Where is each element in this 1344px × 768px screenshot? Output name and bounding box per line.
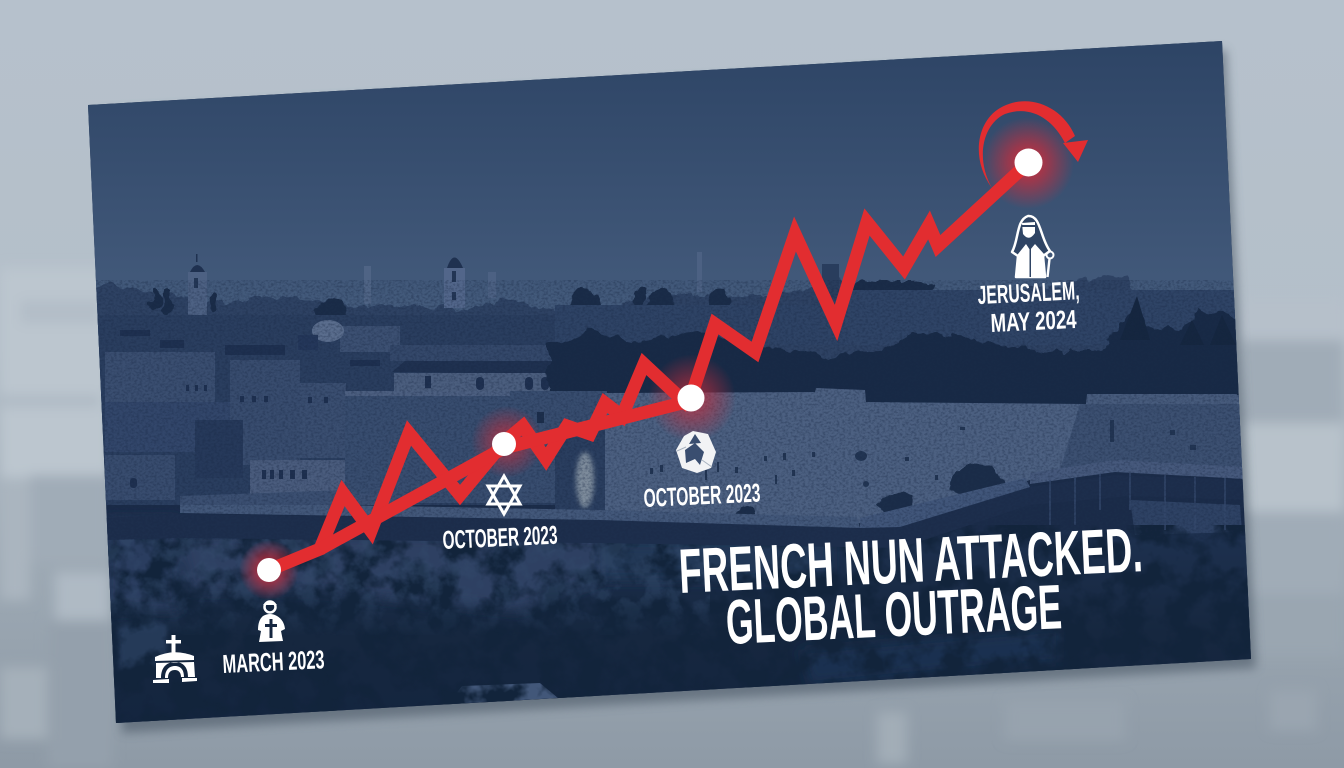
label: October 2023 centre: OCTOBER 2023 xyxy=(643,478,761,513)
western wall xyxy=(605,388,1246,525)
walkway bridge xyxy=(105,460,1248,548)
sky xyxy=(80,35,1260,335)
left retaining wall xyxy=(345,391,607,510)
card drop shadow xyxy=(100,50,1256,733)
hillside behind the wall xyxy=(548,290,1260,420)
bell tower left xyxy=(188,254,207,315)
foreground hillside xyxy=(90,500,1260,730)
red trend line chart xyxy=(269,163,1028,570)
title: GLOBAL OUTRAGE xyxy=(724,572,1063,658)
fine masonry texture xyxy=(90,280,1260,540)
trees in front of wall xyxy=(736,463,1006,514)
icon: nun xyxy=(1012,216,1054,277)
icon: priest xyxy=(258,600,285,642)
dark cypress clusters xyxy=(147,279,936,315)
title xyxy=(677,515,1144,658)
far skyline and towers xyxy=(70,252,1270,426)
mottled foliage texture xyxy=(90,525,1260,730)
icon: hexagon star xyxy=(676,431,716,473)
old city buildings xyxy=(95,315,575,505)
timeline nodes xyxy=(257,148,1042,582)
icon: church xyxy=(153,635,197,683)
label: Jerusalem, May 2024 xyxy=(977,275,1080,338)
circular arrow xyxy=(979,101,1088,188)
label: Jerusalem, May 2024: JERUSALEM, xyxy=(977,275,1080,310)
bell tower right xyxy=(444,258,465,308)
label: March 2023: MARCH 2023 xyxy=(222,644,325,679)
slim minarets xyxy=(364,266,371,304)
point glows xyxy=(239,117,1074,600)
icon: star of David xyxy=(488,476,520,514)
label: Jerusalem, May 2024: MAY 2024 xyxy=(990,304,1078,338)
label: October 2023 left: OCTOBER 2023 xyxy=(442,520,558,555)
